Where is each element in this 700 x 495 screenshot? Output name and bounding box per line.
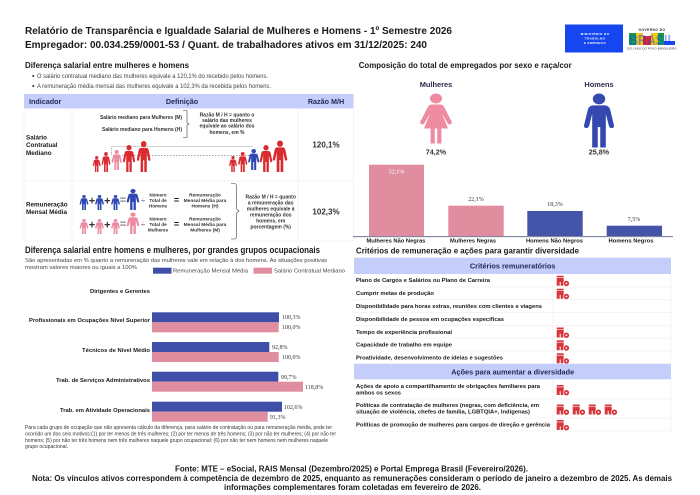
legend <box>153 268 346 274</box>
text block: nota de rodapé do gráfico: ocorrido um dos seis motivos:(1) por ter menos de três mulheres; (2) por ter menos de três homens; (3) por não ter mulheres; (4) por não ter <box>25 432 336 438</box>
definition text: salário mediano: Salário mediano para Mulheres (M) <box>100 115 182 121</box>
panel: critérios remuneratórios: Plano de Cargos e Salários ou Plano de Carreira <box>356 278 491 284</box>
panel: critérios remuneratórios <box>354 258 671 364</box>
panel: ações para aumentar a diversidade <box>354 364 671 431</box>
definition text: razão remuneração: porcentagem (%) <box>250 224 291 230</box>
bullets: resumo <box>32 74 271 90</box>
icon: fórmula mulheres: Mulheres <box>148 228 169 232</box>
row label: remuneração mensal média: Remuneração <box>26 201 68 208</box>
definition text: salário mediano: salário das mulheres <box>202 118 252 124</box>
text block: explicação do gráfico: mostram valores maiores ou iguais a 100% <box>25 265 138 271</box>
logo: ministério do trabalho e emprego <box>565 24 623 52</box>
bar chart: grupos ocupacionais: 100,3% <box>282 315 300 321</box>
bar chart: grupos ocupacionais: 100,0% <box>282 355 300 361</box>
panel: ações para aumentar a diversidade: ambos os sexos <box>356 391 401 397</box>
icon: fórmula homens: = <box>174 195 179 205</box>
table header: Razão M/H <box>308 97 344 106</box>
icon: marcadores ações <box>557 385 616 430</box>
bar chart: sexo e raça/cor: 7,5% <box>628 217 640 223</box>
bar chart: grupos ocupacionais: 100,0% <box>282 325 300 331</box>
bar chart: grupos ocupacionais: 102,6% <box>284 405 302 411</box>
icon: pessoas, salário mediano <box>93 140 287 172</box>
text block: nota de rodapé do gráfico: Para cada grupo de ocupação que não apresenta cálculo da diferença, para salário de contratação ou para remuneração média, pode ter <box>25 425 332 431</box>
definition text: razão remuneração <box>231 184 296 239</box>
panel: critérios remuneratórios: Disponibilidade para horas extras, reuniões com clientes e viagens <box>356 304 542 310</box>
panel: ações para aumentar a diversidade: Políticas de contratação de mulheres (negras, com deficiência, em <box>356 403 539 409</box>
panel: critérios remuneratórios: Tempo de experiência profissional <box>356 330 452 336</box>
logo: ministério do trabalho e emprego: MINISTÉRIO DO <box>581 31 610 36</box>
row label: salário contratual mediano <box>26 134 58 157</box>
icon: mulheres 74,2%: Mulheres <box>420 80 452 89</box>
text block: nota de rodapé do gráfico <box>25 425 336 450</box>
bar chart: sexo e raça/cor <box>353 165 673 244</box>
bar chart: grupos ocupacionais: 99,7% <box>281 375 296 381</box>
text block: fonte e nota: informações complementares foram coletadas em fevereiro de 2026. <box>224 483 481 492</box>
table header <box>29 97 344 106</box>
heading: grupos ocupacionais: Diferença salarial entre homens e mulheres, por grandes grupos ocupacionais <box>25 245 320 255</box>
icon: fórmula homens: Homens (H) <box>192 203 219 209</box>
text block: fonte e nota: Nota: Os vínculos ativos correspondem à competência de dezembro de 2025, enquanto as remunerações consideram o período de janeiro a dezembro de 2025. As demais <box>32 474 673 483</box>
icon: fórmula homens: Remuneração <box>189 192 221 198</box>
icon: fórmula mulheres: = <box>120 218 126 230</box>
value: razão remuneração: 102,3% <box>312 208 340 217</box>
icon: fórmula mulheres: + <box>89 220 95 232</box>
icon: fórmula mulheres: + <box>104 220 111 232</box>
icon: fórmula homens: + <box>89 196 95 208</box>
definition text: salário mediano: homens, em % <box>209 130 245 136</box>
definition text: salário mediano: equivale ao salário dos <box>199 124 255 130</box>
text block: explicação do gráfico <box>25 258 327 271</box>
definition text: razão remuneração: Razão M / H = quanto <box>245 195 296 201</box>
icon: fórmula mulheres: Total de <box>149 222 167 227</box>
definition text: razão remuneração: mulheres equivale à <box>247 206 295 212</box>
panel: critérios remuneratórios: Critérios remuneratórios <box>470 262 555 270</box>
icon: fórmula homens: Total de <box>149 198 167 203</box>
bar chart: sexo e raça/cor: Homens Não Negros <box>526 238 583 244</box>
definition text: razão remuneração: remuneração dos <box>250 212 292 218</box>
text block: fonte e nota <box>32 464 673 492</box>
definition text: razão remuneração: a remuneração das <box>248 201 294 207</box>
icon: homens 25,8% <box>584 80 614 156</box>
panel: ações para aumentar a diversidade: Ações de apoio a compartilhamento de obrigações familiares para <box>356 384 541 390</box>
logo: governo do brasil: DO LADO DO POVO BRASILEIRO <box>627 46 677 50</box>
icon: fórmula mulheres: Remuneração <box>189 216 221 222</box>
icon: homens 25,8%: Homens <box>584 80 614 89</box>
icon: fórmula mulheres: Número <box>149 216 167 222</box>
definition text: salário mediano: Razão M / H = quanto o <box>200 112 254 118</box>
panel: critérios remuneratórios: Proatividade, desenvolvimento de ideias e sugestões <box>356 356 503 362</box>
icon: homens 25,8%: 25,8% <box>589 148 610 156</box>
logo: ministério do trabalho e emprego: E EMPREGO <box>584 41 606 45</box>
logo: ministério do trabalho e emprego: TRABALHO <box>585 36 605 40</box>
title <box>25 25 452 51</box>
bar chart: sexo e raça/cor: Mulheres Negras <box>450 238 496 244</box>
logo: governo do brasil: BRASIL <box>629 32 675 49</box>
text block: nota de rodapé do gráfico: grupo ocupacional. <box>25 444 68 450</box>
heading: critérios: Critérios de remuneração e ações para garantir diversidade <box>356 246 579 256</box>
bar chart: sexo e raça/cor: 18,3% <box>547 202 563 208</box>
legend: Salário Contratual Mediano <box>274 268 346 274</box>
icon: fórmula mulheres: ÷ <box>141 220 146 229</box>
icon: fórmula homens <box>80 189 227 210</box>
panel: critérios remuneratórios: Cumprir metas de produção <box>356 291 434 297</box>
icon: fórmula mulheres <box>80 212 227 234</box>
icon: mulheres 74,2%: 74,2% <box>426 148 447 156</box>
bar chart: grupos ocupacionais <box>29 289 323 422</box>
icon: fórmula mulheres: Mensal Média para <box>184 222 227 228</box>
icon: marcadores critérios <box>557 276 568 363</box>
text block: fonte e nota: Fonte: MTE – eSocial, RAIS Mensal (Dezembro/2025) e Portal Emprega Brasil (Fevereiro/2026). <box>175 464 528 474</box>
row label: salário contratual mediano: Mediano <box>26 150 52 157</box>
bar chart: grupos ocupacionais: 92,8% <box>272 345 288 351</box>
panel: ações para aumentar a diversidade: Políticas de promoção de mulheres para cargos de direção e gerência <box>356 422 551 428</box>
bar chart: grupos ocupacionais: 91,3% <box>270 415 286 421</box>
bullets: resumo: A remuneração média mensal das mulheres equivale a 102,3% da recebida pelos homens. <box>37 84 271 90</box>
table header: Definição <box>166 97 199 106</box>
panel: critérios remuneratórios: Disponibilidade de pessoa em ocupações específicas <box>356 317 504 323</box>
bullets: resumo: O salário contratual mediano das mulheres equivale a 120,1% do recebido pelos homens. <box>37 74 268 80</box>
bar chart: grupos ocupacionais: Trab. de Serviços Administrativos <box>56 378 150 384</box>
icon: fórmula homens: ÷ <box>141 196 146 205</box>
bar chart: grupos ocupacionais: 118,8% <box>305 385 323 391</box>
icon: fórmula homens: Homens <box>149 203 168 208</box>
row label: salário contratual mediano: Salário <box>26 134 47 142</box>
panel: tabela de indicadores <box>24 94 354 241</box>
title: Relatório de Transparência e Igualdade Salarial de Mulheres e Homens - 1º Semestre 2026 <box>25 25 452 37</box>
icon: fórmula homens: + <box>104 196 111 208</box>
panel: ações para aumentar a diversidade: situação de violência, chefes de família, LGBTQIA+, Indígenas) <box>356 410 530 416</box>
bar chart: grupos ocupacionais: Profissionais em Ocupações Nível Superior <box>29 318 151 324</box>
bar chart: sexo e raça/cor: 22,1% <box>468 197 484 203</box>
table header: Indicador <box>29 97 62 106</box>
icon: fórmula mulheres: = <box>174 219 179 229</box>
value: razão salário contratual: 120,1% <box>312 141 340 150</box>
icon: mulheres 74,2% <box>420 80 452 156</box>
definition text: razão remuneração: homens, em <box>256 218 286 224</box>
heading: diferença salarial: Diferença salarial entre mulheres e homens <box>25 60 189 70</box>
panel: critérios remuneratórios: Capacidade de trabalho em equipe <box>356 343 453 349</box>
bar chart: grupos ocupacionais: Dirigentes e Gerentes <box>90 289 150 295</box>
bar chart: sexo e raça/cor: 52,1% <box>389 170 404 176</box>
icon: fórmula homens: = <box>120 194 126 206</box>
icon: fórmula mulheres: Mulheres (M) <box>190 227 220 233</box>
bar chart: grupos ocupacionais: Técnicos de Nível Médio <box>82 348 150 354</box>
text block: nota de rodapé do gráfico: homens; (5) por não ter três homens nem três mulheres naquele grupo ocupacional; (6) por não ter nem homens nem mulheres naquele <box>25 438 328 444</box>
logo: governo do brasil: GOVERNO DO <box>639 28 665 32</box>
row label: remuneração mensal média <box>26 201 68 216</box>
logo: governo do brasil <box>627 28 677 50</box>
icon: fórmula homens: Número <box>149 192 167 197</box>
definition text: salário mediano: Salário mediano para Homens (H) <box>102 127 182 133</box>
row label: salário contratual mediano: Contratual <box>26 142 58 149</box>
title: Empregador: 00.034.259/0001-53 / Quant. de trabalhadores ativos em 31/12/2025: 240 <box>25 39 427 51</box>
icon: fórmula homens: Mensal Média para <box>184 198 227 204</box>
definition text: salário mediano <box>100 110 255 138</box>
text block: explicação do gráfico: São apresentadas em % quanto a remuneração das mulheres vale em relação à dos homens. As situações positivas <box>25 258 327 264</box>
legend: Remuneração Mensal Média <box>173 268 249 274</box>
heading: composição: Composição do total de empregados por sexo e raça/cor <box>359 60 572 70</box>
bar chart: sexo e raça/cor: Homens Negros <box>608 238 654 244</box>
bar chart: sexo e raça/cor: Mulheres Não Negras <box>366 238 426 244</box>
bar chart: grupos ocupacionais: Trab. em Atividade Operacionais <box>60 408 150 414</box>
row label: remuneração mensal média: Mensal Média <box>26 209 67 216</box>
panel: ações para aumentar a diversidade: Ações para aumentar a diversidade <box>451 367 574 376</box>
